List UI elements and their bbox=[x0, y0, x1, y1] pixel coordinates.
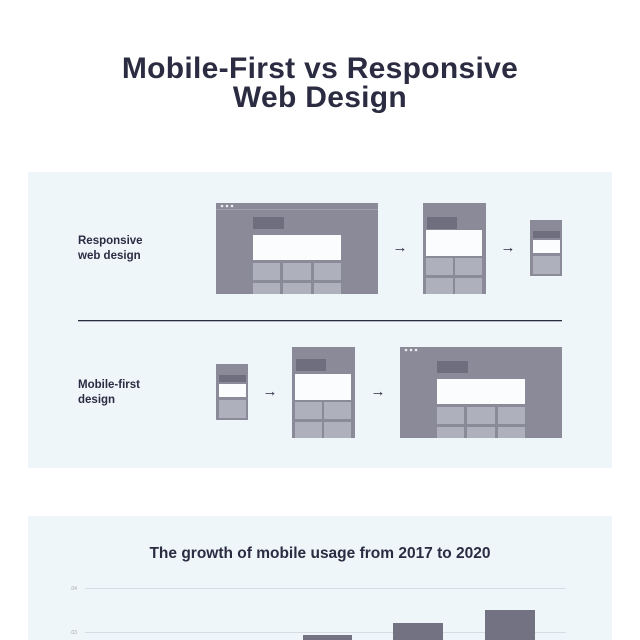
title bbox=[122, 52, 518, 114]
arrow 2: → bbox=[500, 239, 516, 256]
phone mockup responsive bbox=[530, 220, 562, 276]
bar chart bbox=[70, 586, 566, 640]
arrow 1: → bbox=[392, 239, 408, 256]
title: Mobile-First vs Responsive bbox=[122, 52, 518, 85]
chart title: The growth of mobile usage from 2017 to 2020 bbox=[149, 545, 491, 562]
wireframes diagram bbox=[78, 203, 562, 438]
title: Web Design bbox=[233, 81, 407, 114]
label: mobile-first: design bbox=[78, 394, 115, 406]
label: mobile-first: Mobile-first bbox=[78, 379, 140, 391]
tablet mockup mobile-first bbox=[292, 347, 355, 438]
arrow 4: → bbox=[370, 383, 386, 400]
panel: mobile usage chart bbox=[28, 516, 612, 640]
panel: design comparison bbox=[28, 172, 612, 468]
label: mobile-first bbox=[78, 379, 140, 406]
label: responsive: web design bbox=[78, 250, 141, 262]
phone mockup mobile-first bbox=[216, 364, 248, 420]
arrow 3: → bbox=[262, 383, 278, 400]
label: responsive bbox=[78, 235, 143, 262]
bar chart: .04 bbox=[70, 586, 77, 592]
tablet mockup responsive bbox=[423, 203, 486, 294]
desktop mockup responsive bbox=[216, 203, 378, 294]
label: responsive: Responsive bbox=[78, 235, 143, 247]
bar chart: .03 bbox=[70, 630, 77, 636]
desktop mockup mobile-first bbox=[400, 347, 562, 438]
